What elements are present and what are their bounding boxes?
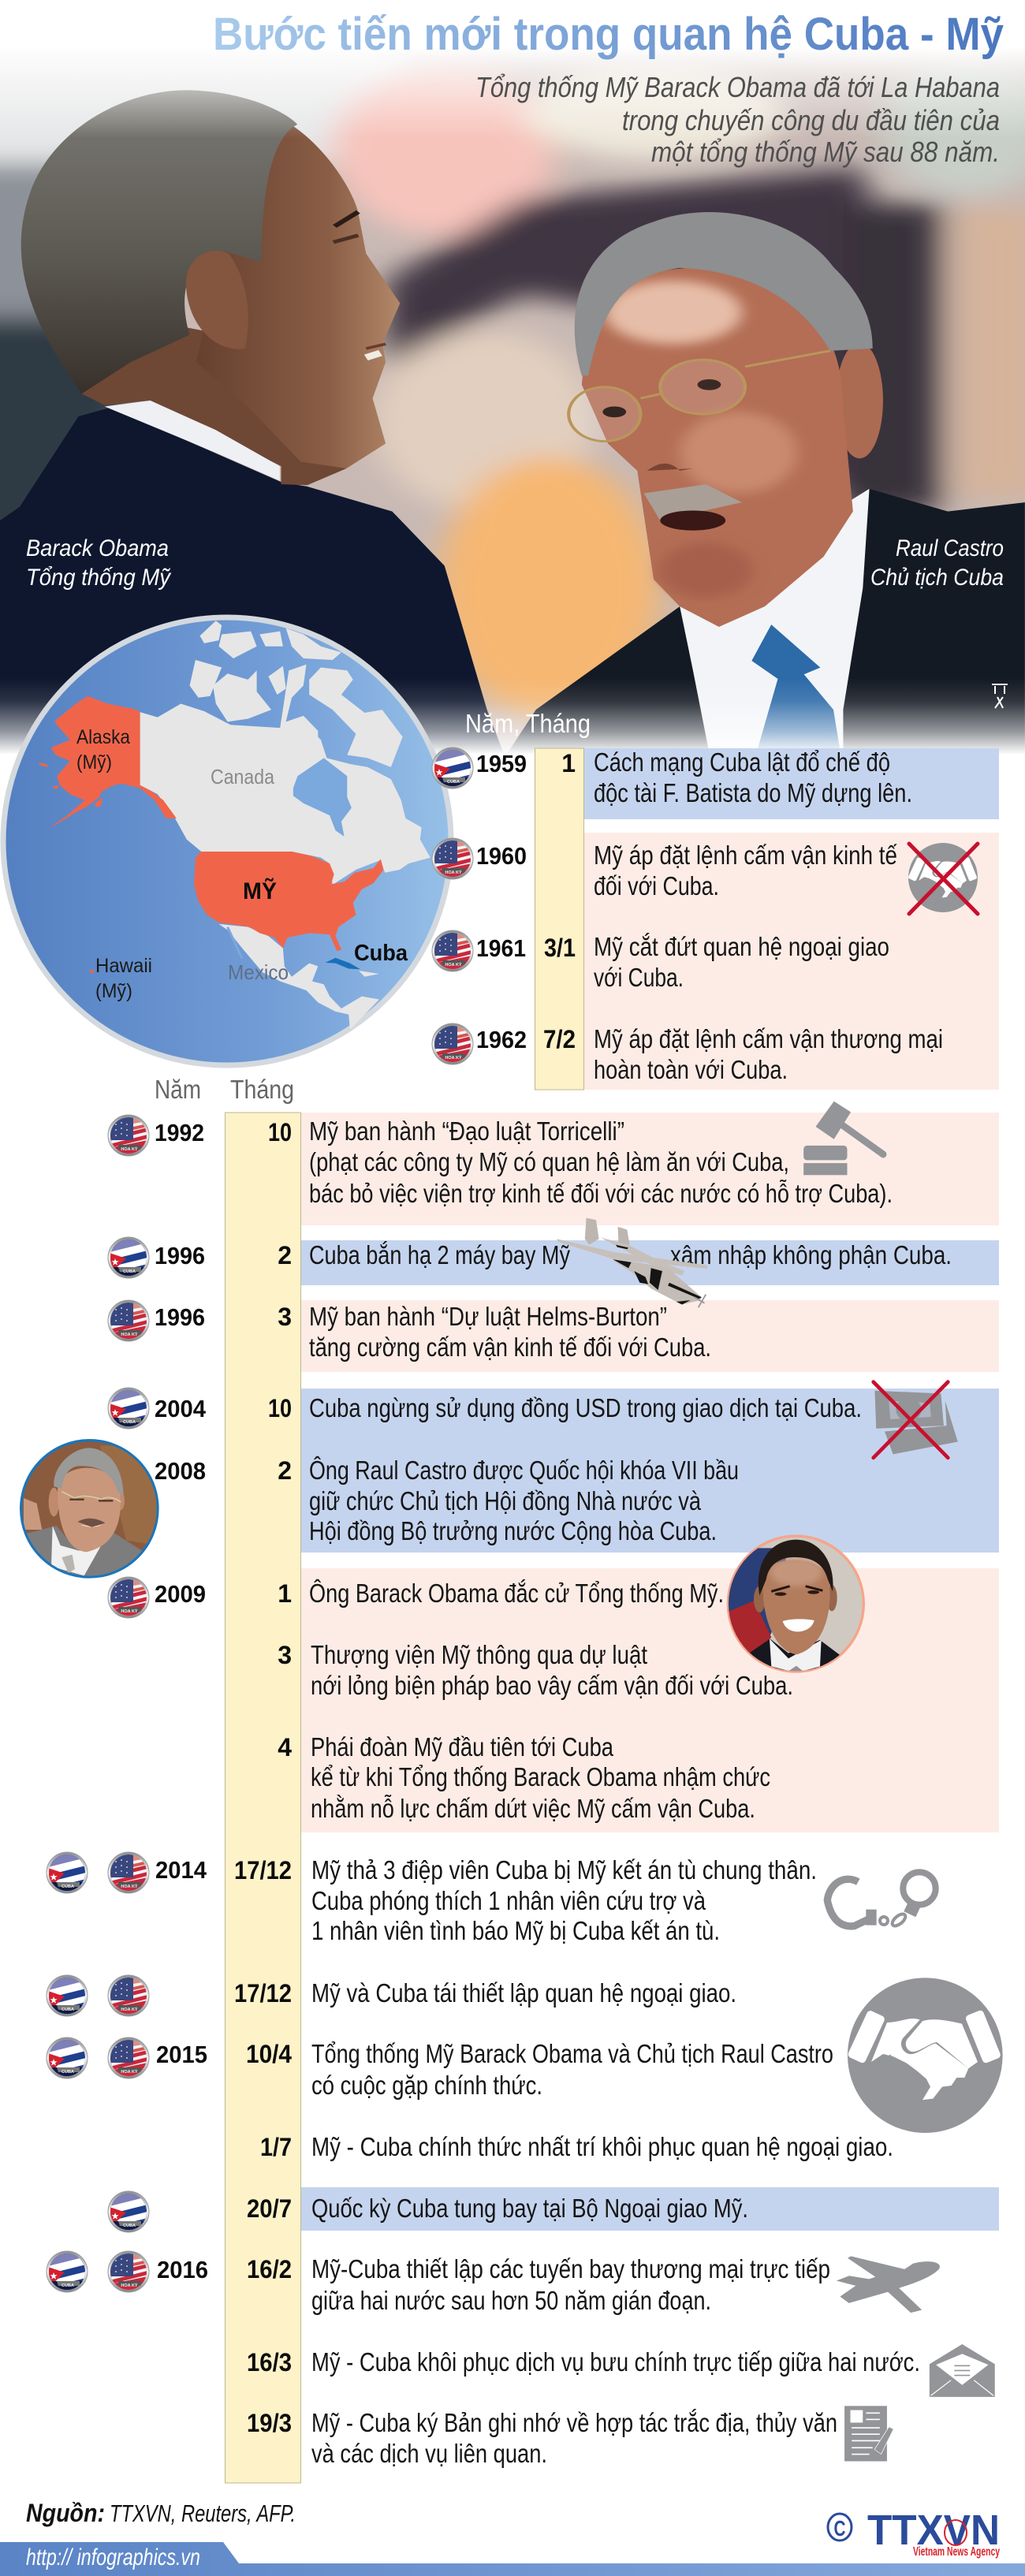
- footer bar with URL: [0, 2542, 1025, 2576]
- row 1962: 7/2: [543, 1025, 576, 1053]
- row 1962: HOA KỲ: [445, 1055, 462, 1061]
- row 2009: kể từ khi Tổng thống Barack Obama nhậm chức: [311, 1762, 770, 1791]
- row 2004: CUBA: [123, 1420, 136, 1425]
- row 2014: [47, 1852, 817, 1945]
- header: month: Tháng: [230, 1075, 294, 1104]
- row 16/3: 16/3: [247, 2348, 292, 2377]
- row 1961: 1961: [476, 934, 526, 962]
- map of North America: [3, 617, 451, 1065]
- row 1996 Cuba: [108, 1237, 952, 1278]
- map labels: Canada: [211, 765, 274, 788]
- row 2016: 16/2: [247, 2255, 292, 2283]
- Castro glasses: [568, 351, 830, 442]
- Obama collar: [105, 401, 280, 481]
- row 20/7: [108, 2191, 748, 2232]
- row 2014: Cuba phóng thích 1 nhân viên cứu trợ và: [311, 1886, 706, 1915]
- row 2008: giữ chức Chủ tịch Hội đồng Nhà nước và: [309, 1486, 702, 1515]
- Obama figure: [0, 90, 510, 770]
- row 2009: 2009: [155, 1580, 206, 1608]
- land: Canada and Mexico: [140, 621, 430, 1030]
- row 2014: CUBA: [62, 1884, 74, 1889]
- portrait: Barack Obama: [728, 1536, 863, 1674]
- row 2016: HOA KỲ: [121, 2283, 138, 2288]
- Castro figure: [497, 212, 1025, 770]
- Obama face: [196, 127, 400, 468]
- source line: [26, 2499, 296, 2527]
- row 2015: 2015: [156, 2041, 207, 2068]
- row 1960: [432, 838, 897, 900]
- row 1992: bác bỏ việc viện trợ kinh tế đối với các nước có hỗ trợ Cuba).: [309, 1179, 893, 1208]
- Cuba island: [326, 958, 360, 969]
- row 1959: [432, 747, 912, 807]
- row 1996 Cuba: 1996: [155, 1242, 205, 1269]
- row 2008: 2008: [155, 1457, 206, 1485]
- row 2016: Mỹ-Cuba thiết lập các tuyến bay thương mại trực tiếp: [311, 2254, 830, 2283]
- Obama hair: [21, 90, 297, 393]
- row 2015: HOA KỲ: [121, 2069, 138, 2075]
- row 17/12: HOA KỲ: [121, 2007, 138, 2012]
- row 2016: giữa hai nước sau hơn 50 năm gián đoạn.: [311, 2286, 711, 2315]
- row 1/7: Mỹ - Cuba chính thức nhất trí khôi phục quan hệ ngoại giao.: [311, 2132, 893, 2161]
- row 2009: nhằm nỗ lực chấm dứt việc Mỹ cấm vận Cuba.: [311, 1794, 755, 1823]
- icon: airplane: [841, 2257, 937, 2311]
- Castro tie: [751, 624, 840, 748]
- row 1961: Mỹ cắt đứt quan hệ ngoại giao: [594, 932, 889, 961]
- icon: gavel: [803, 1102, 883, 1175]
- row 1959: CUBA: [447, 780, 460, 785]
- row 2009: Phái đoàn Mỹ đầu tiên tới Cuba: [311, 1732, 614, 1761]
- icon: handshake: [847, 1978, 1003, 2133]
- row 19/3: và các dịch vụ liên quan.: [311, 2439, 547, 2468]
- row 1960: Mỹ áp đặt lệnh cấm vận kinh tế: [594, 841, 897, 870]
- row 2009: 1: [278, 1579, 292, 1608]
- row 1996 USA: HOA KỲ: [121, 1332, 138, 1337]
- row 1961: với Cuba.: [594, 963, 684, 992]
- top fade: [0, 0, 1025, 138]
- background bands: [301, 1113, 999, 2231]
- Hawaii: [89, 969, 95, 974]
- row 1962: hoàn toàn với Cuba.: [594, 1055, 788, 1084]
- row 2004: Cuba ngừng sử dụng đồng USD trong giao dịch tại Cuba.: [309, 1393, 862, 1422]
- row 1996 USA: [108, 1300, 711, 1362]
- row 1960: 1960: [476, 842, 527, 870]
- Castro hair: [575, 212, 873, 375]
- row 1992: [108, 1115, 893, 1208]
- row 2014: Mỹ thả 3 điệp viên Cuba bị Mỹ kết án tù chung thân.: [311, 1855, 817, 1884]
- caption: Raul Castro: [870, 535, 1004, 591]
- row 2009: Thượng viện Mỹ thông qua dự luật: [311, 1640, 647, 1669]
- row 1992: 10: [268, 1118, 292, 1146]
- ocean globe: [3, 617, 451, 1065]
- Obama ear: [186, 251, 248, 349]
- row 1992: (phạt các công ty Mỹ có quan hệ làm ăn với Cuba,: [309, 1147, 789, 1176]
- row 20/7: CUBA: [123, 2224, 136, 2228]
- row 1960: đối với Cuba.: [594, 871, 719, 900]
- Castro ear: [839, 349, 883, 459]
- caption: Raul Castro: Raul Castro: [896, 535, 1004, 561]
- subtitle: [475, 71, 1000, 168]
- row 17/12: Mỹ và Cuba tái thiết lập quan hệ ngoại giao.: [311, 1978, 736, 2007]
- icon: envelope: [930, 2344, 995, 2397]
- map labels: Cuba: [354, 941, 408, 966]
- TTXVN logo: TTXVN: [867, 2507, 1000, 2554]
- map labels: Alaska: [76, 726, 130, 748]
- row 1996 Cuba: xâm nhập không phận Cuba.: [670, 1240, 952, 1269]
- row 2014: 1 nhân viên tình báo Mỹ bị Cuba kết án tù.: [311, 1916, 720, 1945]
- Alaska: [48, 696, 177, 829]
- row 1959: độc tài F. Batista do Mỹ dựng lên.: [594, 778, 912, 807]
- row 2015: CUBA: [62, 2070, 74, 2075]
- row 19/3: [247, 2408, 837, 2468]
- map labels: Mexico: [228, 960, 289, 984]
- row 1/7: 1/7: [260, 2133, 292, 2161]
- upper month column: [535, 748, 583, 1090]
- signature mark: [992, 684, 1008, 708]
- row 1996 Cuba: 2: [278, 1241, 292, 1269]
- row 17/12: 17/12: [234, 1979, 292, 2007]
- row 2008: [155, 1456, 739, 1545]
- row 2015: [47, 2037, 833, 2100]
- row 1961: [432, 930, 889, 992]
- row 1996 USA: 1996: [155, 1303, 205, 1331]
- row 16/3: Mỹ - Cuba khôi phục dịch vụ bưu chính trực tiếp giữa hai nước.: [311, 2347, 920, 2377]
- icon: aircraft: [557, 1218, 707, 1307]
- TTXVN logo: [828, 2507, 1000, 2559]
- map labels: [76, 726, 408, 1002]
- map labels: (Mỹ): [95, 980, 132, 1002]
- row 2016: [47, 2251, 830, 2315]
- footer bar with URL: http:// infographics.vn: [26, 2544, 200, 2570]
- header: year: Năm: [155, 1075, 201, 1104]
- contiguous United States: [194, 852, 384, 951]
- row 1959: 1959: [476, 750, 527, 777]
- row 2008: Ông Raul Castro được Quốc hội khóa VII bầu: [309, 1456, 739, 1485]
- icon: document and pen: [844, 2406, 893, 2461]
- row 2004: 2004: [155, 1395, 207, 1422]
- row 1996 USA: Mỹ ban hành “Dự luật Helms-Burton”: [309, 1302, 667, 1331]
- row 1992: Mỹ ban hành “Đạo luật Torricelli”: [309, 1117, 624, 1146]
- lower month column: [226, 1113, 301, 2483]
- row 1959: Cách mạng Cuba lật đổ chế độ: [594, 747, 890, 777]
- map labels: MỸ: [243, 878, 277, 904]
- row 1962: [432, 1023, 943, 1084]
- row 2016: CUBA: [62, 2283, 74, 2288]
- row 1961: 3/1: [544, 934, 576, 962]
- row 20/7: Quốc kỳ Cuba tung bay tại Bộ Ngoại giao Mỹ.: [311, 2194, 748, 2223]
- row 2014: HOA KỲ: [121, 1884, 138, 1889]
- map labels: (Mỹ): [76, 751, 112, 774]
- row 2009: 4: [278, 1733, 292, 1761]
- row 2009: HOA KỲ: [121, 1609, 138, 1614]
- blurred photo background: [0, 0, 1025, 757]
- row 2009: 3: [278, 1641, 292, 1669]
- row 17/12: [47, 1975, 736, 2016]
- row 2008: 2: [278, 1456, 292, 1485]
- row 2015: 10/4: [246, 2040, 292, 2068]
- row 2008: Hội đồng Bộ trưởng nước Cộng hòa Cuba.: [309, 1516, 717, 1545]
- row 20/7: 20/7: [247, 2194, 292, 2223]
- row 1992: HOA KỲ: [121, 1146, 138, 1152]
- row 2016: 2016: [157, 2256, 208, 2283]
- Castro face: [582, 268, 853, 627]
- Obama suit: [0, 408, 510, 770]
- row 1996 USA: 3: [278, 1303, 292, 1331]
- row 2009: Ông Barack Obama đắc cử Tổng thống Mỹ.: [309, 1579, 724, 1608]
- row 19/3: Mỹ - Cuba ký Bản ghi nhớ về hợp tác trắc địa, thủy văn: [311, 2408, 837, 2437]
- caption: Raul Castro: Chủ tịch Cuba: [870, 565, 1004, 591]
- icon: handcuffs: [827, 1872, 936, 1928]
- row 1996 USA: tăng cường cấm vận kinh tế đối với Cuba.: [309, 1333, 711, 1362]
- row 17/12: CUBA: [62, 2007, 74, 2012]
- bottom fade: [0, 678, 1025, 755]
- row 1960: HOA KỲ: [445, 870, 462, 875]
- row 1959: 1: [561, 749, 576, 777]
- Castro suit: [497, 489, 1025, 770]
- map labels: Hawaii: [95, 955, 152, 977]
- row 2004: [108, 1388, 862, 1429]
- hero photo: Obama and Raul Castro: [0, 0, 1025, 770]
- row 19/3: 19/3: [247, 2409, 292, 2437]
- source line: TTXVN, Reuters, AFP.: [110, 2500, 296, 2527]
- TTXVN logo: C: [834, 2516, 845, 2541]
- row 2014: 2014: [155, 1856, 207, 1884]
- row 2014: 17/12: [234, 1856, 292, 1884]
- caption: Barack Obama: Tổng thống Mỹ: [26, 565, 172, 591]
- blue row 1959: [584, 748, 999, 819]
- header: year, month (upper): Năm, Tháng: [465, 709, 591, 738]
- row 2004: 10: [268, 1394, 292, 1422]
- icon: broken handshake: [908, 843, 978, 914]
- Obama neck: [82, 317, 346, 485]
- row 1996 Cuba: Cuba bắn hạ 2 máy bay Mỹ: [309, 1240, 570, 1269]
- row 2015: Tổng thống Mỹ Barack Obama và Chủ tịch Raul Castro: [311, 2039, 833, 2068]
- icon: crossed-out money: [874, 1382, 958, 1458]
- row 1961: HOA KỲ: [445, 962, 462, 967]
- Castro shirt: [680, 489, 870, 770]
- row 2015: có cuộc gặp chính thức.: [311, 2071, 542, 2100]
- row 1996 Cuba: CUBA: [123, 1269, 136, 1274]
- caption: Barack Obama: [26, 535, 172, 591]
- row 1992: 1992: [155, 1119, 204, 1146]
- row 1962: 1962: [476, 1026, 527, 1053]
- row 2009: [108, 1577, 793, 1823]
- source line: Nguồn:: [26, 2499, 105, 2527]
- pink rows 1960-1962: [584, 833, 999, 1090]
- row 2009: nới lỏng biện pháp bao vây cấm vận đối với Cuba.: [311, 1671, 793, 1700]
- caption: Barack Obama: Barack Obama: [26, 535, 169, 561]
- row 1962: Mỹ áp đặt lệnh cấm vận thương mại: [594, 1024, 943, 1053]
- Castro moustache and mouth: [644, 484, 742, 520]
- portrait: Raul Castro: [21, 1441, 158, 1583]
